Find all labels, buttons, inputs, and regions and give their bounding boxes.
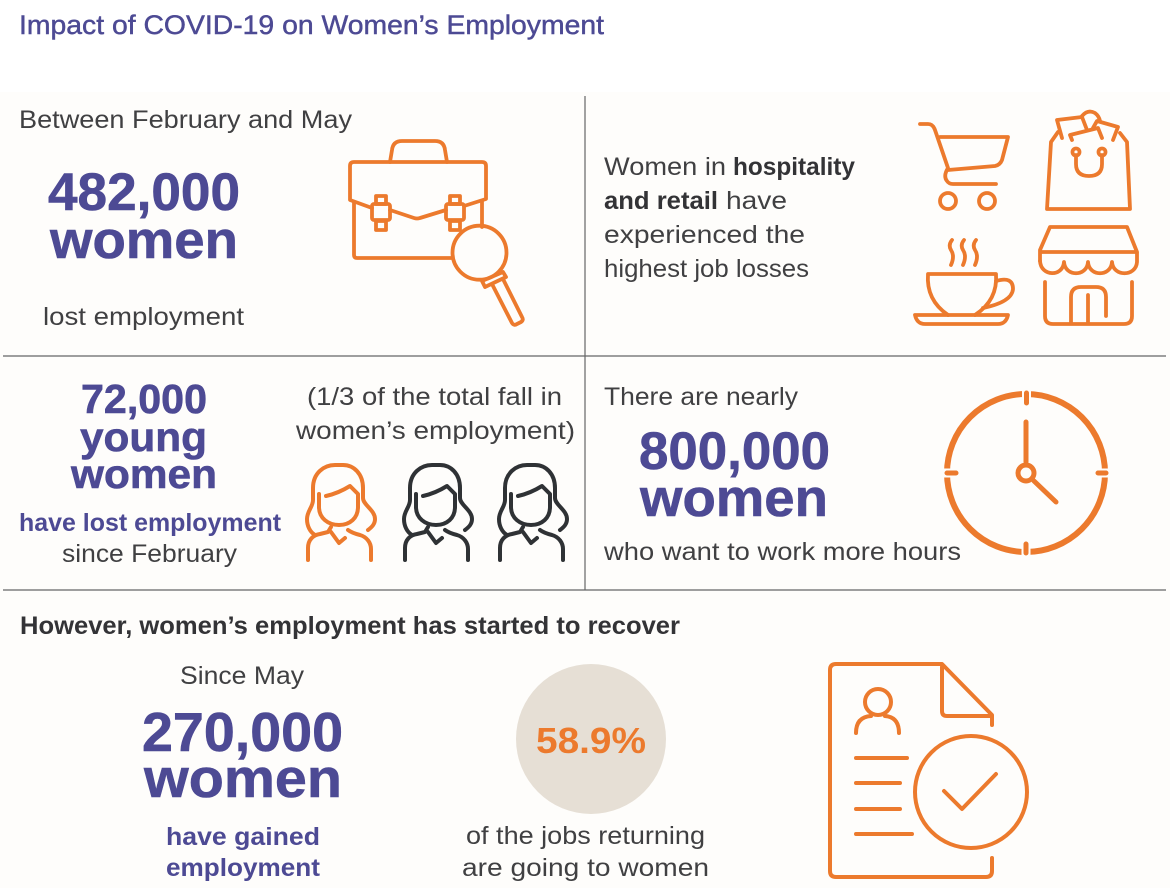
statistic: 482,000 women: 482,000: [48, 163, 240, 222]
panel: want more hours: [603, 383, 1109, 566]
text: one third note: women’s employment): [295, 417, 575, 445]
statistic: 72,000 young women: women: [70, 451, 217, 497]
text: period: Between February and May: [19, 106, 353, 134]
panel: hospitality and retail: [604, 112, 1137, 324]
text: since May: Since May: [180, 662, 305, 690]
text: hospitality and retail job losses: highest job losses: [604, 255, 809, 283]
title: Impact of COVID-19 on Women’s Employment: [19, 10, 605, 40]
text: one third note: (1/3 of the total fall in: [307, 383, 562, 411]
text: since February: since February: [62, 540, 238, 568]
panel: women who lost employment: [19, 106, 523, 331]
statistic: 72,000 young women: 72,000: [81, 376, 207, 422]
statistic: 72,000 young women: [70, 376, 217, 497]
text: lost employment: lost employment: [43, 303, 244, 331]
icon: shop front: [1040, 227, 1137, 324]
icon: shopping cart: [920, 124, 1008, 209]
icon: resume document with check mark: [830, 664, 1027, 877]
text: hospitality and retail job losses: hospitality: [733, 153, 855, 181]
statistic: 270,000 women: [142, 701, 343, 809]
panel: young women: [19, 376, 575, 568]
statistic: 482,000 women: [48, 163, 240, 270]
icon: clock: [944, 390, 1109, 556]
statistic: 58.9% circle: 58.9%: [536, 720, 646, 761]
text: hospitality and retail job losses: have: [726, 187, 787, 215]
text: have lost employment: have lost employment: [19, 509, 282, 537]
statistic: 800,000 women: women: [639, 469, 828, 528]
text: who want to work more hours: who want to work more hours: [603, 538, 961, 566]
text: hospitality and retail job losses: Women in: [604, 153, 726, 181]
text: there are nearly: There are nearly: [604, 383, 799, 411]
icon: briefcase with magnifying glass: [350, 141, 523, 325]
statistic: 800,000 women: 800,000: [639, 422, 830, 481]
text: hospitality and retail job losses: experienced the: [604, 221, 805, 249]
heading: recovery: However, women’s employment has started to recover: [20, 612, 680, 640]
text: have gained employment: employment: [166, 854, 321, 882]
icon: coffee cup: [915, 240, 1013, 324]
text: have gained employment: have gained: [166, 823, 320, 851]
statistic: 800,000 women: [639, 422, 830, 528]
text: have gained employment: [166, 823, 321, 882]
statistic: 270,000 women: 270,000: [142, 701, 343, 763]
statistic: 58.9% circle: [516, 664, 666, 814]
text: one third note: [295, 383, 575, 445]
icon: woman dark: [404, 465, 472, 560]
text: jobs returning to women: of the jobs returning: [466, 822, 705, 850]
icon: woman dark: [499, 465, 567, 560]
icon: shopping bag: [1047, 112, 1130, 209]
icon: woman orange: [307, 465, 375, 560]
panel: recovery: [20, 612, 1027, 882]
text: jobs returning to women: [462, 822, 709, 882]
statistic: 72,000 young women: young: [80, 414, 207, 460]
statistic: 482,000 women: women: [49, 211, 238, 270]
text: hospitality and retail job losses: and retail: [604, 187, 718, 215]
text: hospitality and retail job losses: [604, 153, 855, 283]
text: jobs returning to women: are going to women: [462, 854, 709, 882]
statistic: 270,000 women: women: [143, 747, 342, 809]
